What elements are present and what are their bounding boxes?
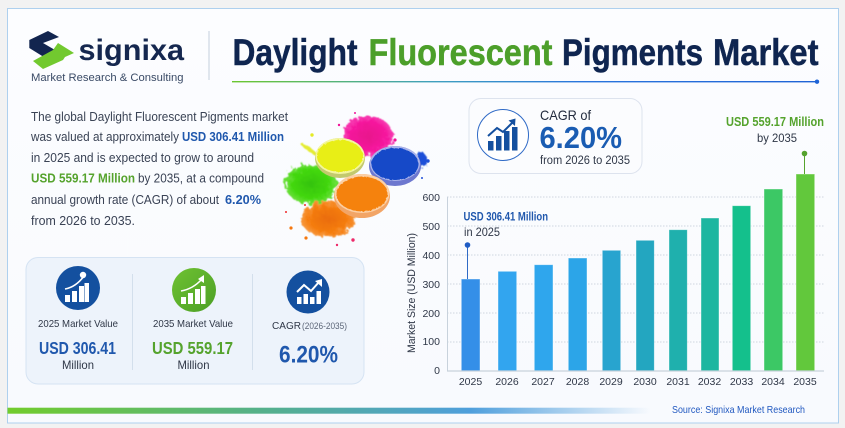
intro paragraph: by 2035, at a compound bbox=[138, 172, 264, 186]
annotation: 2025 value bbox=[464, 210, 548, 279]
x axis labels: 2035 bbox=[793, 376, 817, 388]
stat: CAGR bbox=[272, 270, 347, 368]
y axis title: Market Size (USD Million) bbox=[406, 233, 418, 353]
callout: CAGR bbox=[469, 98, 642, 174]
stat: CAGR: 6.20% bbox=[279, 342, 338, 368]
y axis labels: 0 bbox=[434, 365, 440, 377]
intro paragraph: USD 306.41 Million bbox=[182, 130, 284, 144]
x axis labels: 2032 bbox=[698, 376, 721, 388]
bar chart: market size 2025-2035 bbox=[406, 115, 824, 388]
icon: rising bars blue bbox=[56, 266, 100, 310]
title: Daylight bbox=[232, 32, 358, 73]
title: Market bbox=[713, 32, 818, 73]
logo mark bbox=[29, 31, 74, 69]
intro paragraph: was valued at approximately bbox=[30, 130, 180, 144]
stat: 2035 market value bbox=[152, 268, 233, 372]
logo tagline: Market Research & Consulting bbox=[31, 72, 184, 84]
y axis labels: 300 bbox=[422, 279, 440, 291]
stat: 2025 market value: USD 306.41 bbox=[39, 338, 116, 358]
annotation: 2035 value: USD 559.17 Million bbox=[726, 115, 824, 129]
y axis labels: 400 bbox=[422, 250, 440, 262]
title bbox=[232, 32, 818, 73]
orange bowl bbox=[334, 174, 390, 218]
stat: 2035 market value: USD 559.17 bbox=[152, 338, 233, 358]
stat: 2035 market value: 2035 Market Value bbox=[153, 318, 233, 330]
stat: 2035 market value: Million bbox=[178, 358, 210, 372]
y axis labels bbox=[422, 192, 440, 377]
x axis labels: 2028 bbox=[566, 376, 589, 388]
intro paragraph: The global Daylight Fluorescent Pigments market bbox=[31, 110, 288, 124]
panel: key stats bbox=[26, 258, 364, 384]
powder splashes bbox=[285, 116, 427, 237]
x axis labels: 2033 bbox=[730, 376, 753, 388]
yellow bowl bbox=[315, 138, 365, 178]
bars bbox=[461, 174, 815, 371]
powder specks bbox=[285, 112, 430, 246]
source note: Source: Signixa Market Research bbox=[672, 404, 805, 416]
intro paragraph: in 2025 and is expected to grow to around bbox=[31, 151, 254, 165]
icon: rising bars green bbox=[172, 268, 216, 312]
icon: growth chart bbox=[286, 270, 330, 314]
stat: CAGR: CAGR bbox=[272, 320, 301, 332]
intro paragraph bbox=[30, 110, 288, 228]
annotation: 2035 value: by 2035 bbox=[757, 131, 797, 145]
callout: CAGR: CAGR of bbox=[540, 107, 591, 123]
illustration: fluorescent powder bowls bbox=[285, 112, 430, 246]
icon: CAGR growth bars bbox=[478, 110, 528, 160]
callout: CAGR: from 2026 to 2035 bbox=[540, 155, 630, 167]
stat: 2025 market value: 2025 Market Value bbox=[38, 318, 118, 330]
stat: 2025 market value: Million bbox=[62, 358, 94, 372]
stat: CAGR: (2026-2035) bbox=[302, 321, 347, 331]
intro paragraph: from 2026 to 2035. bbox=[31, 214, 135, 228]
blue bowl bbox=[369, 146, 421, 186]
y axis labels: 600 bbox=[422, 192, 440, 204]
x axis labels: 2027 bbox=[531, 376, 555, 388]
y axis labels: 500 bbox=[422, 221, 440, 233]
title: Fluorescent bbox=[368, 32, 552, 73]
y axis labels: 200 bbox=[422, 308, 440, 320]
x axis labels: 2030 bbox=[633, 376, 657, 388]
intro paragraph: annual growth rate (CAGR) of about bbox=[31, 193, 219, 207]
logo wordmark: signixa bbox=[78, 34, 184, 67]
logo: Signixa bbox=[29, 31, 184, 84]
x axis labels: 2025 bbox=[459, 376, 482, 388]
x axis labels: 2026 bbox=[495, 376, 519, 388]
annotation: 2025 value: USD 306.41 Million bbox=[464, 210, 548, 224]
title: Pigments bbox=[562, 32, 703, 73]
intro paragraph: 6.20% bbox=[225, 193, 261, 207]
callout: CAGR: 6.20% bbox=[540, 120, 622, 155]
x axis labels: 2031 bbox=[666, 376, 690, 388]
x axis labels: 2034 bbox=[761, 376, 785, 388]
title underline bbox=[232, 80, 819, 84]
stat: 2025 market value bbox=[38, 266, 118, 372]
intro paragraph: USD 559.17 Million bbox=[31, 172, 135, 186]
x axis labels: 2029 bbox=[599, 376, 623, 388]
x axis labels bbox=[459, 376, 817, 388]
footer gradient bar bbox=[8, 408, 650, 414]
y axis labels: 100 bbox=[422, 336, 440, 348]
annotation: 2035 value bbox=[726, 115, 824, 174]
annotation: 2025 value: in 2025 bbox=[464, 225, 500, 239]
